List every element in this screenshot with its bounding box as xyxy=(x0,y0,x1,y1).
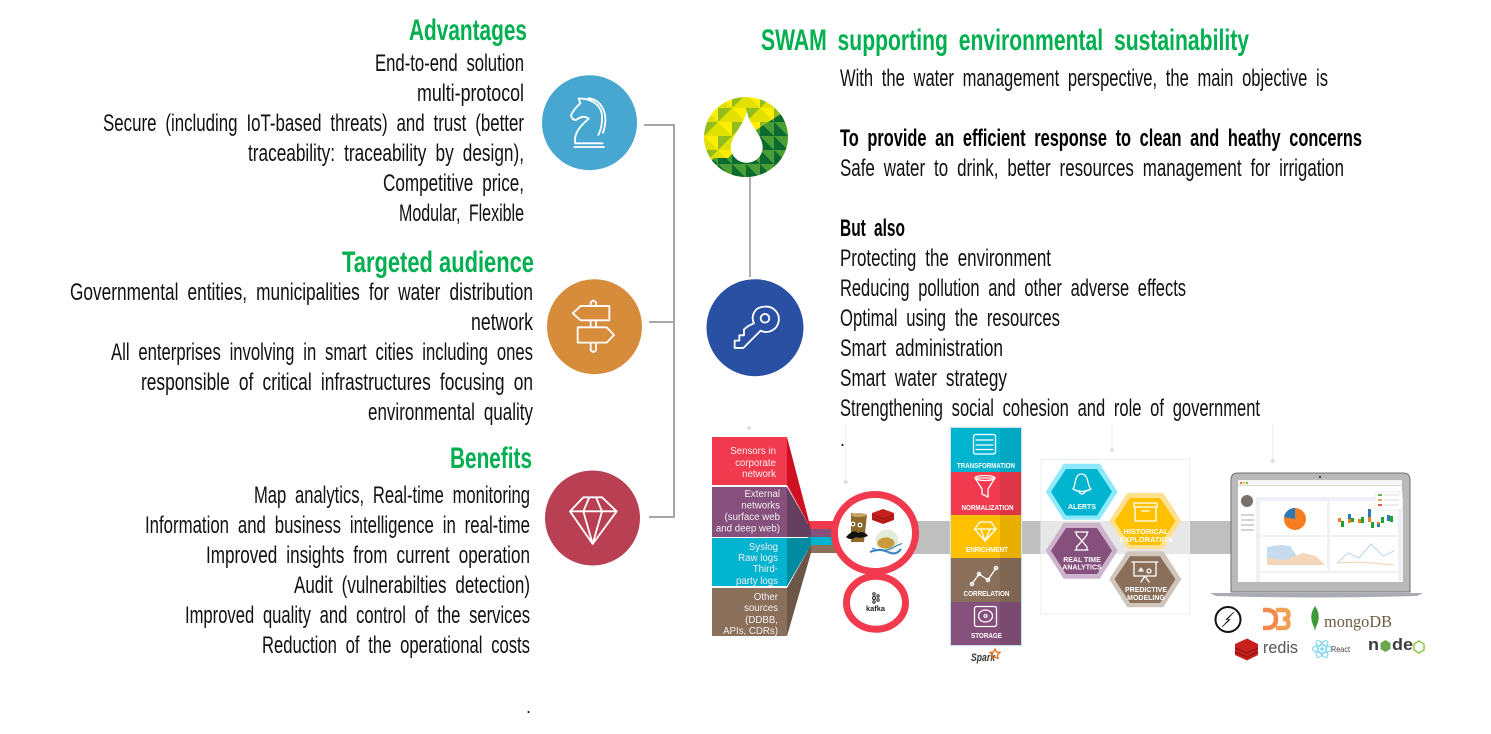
pin lines xyxy=(747,423,1275,484)
icon: kafka: kafka xyxy=(866,606,885,613)
source: external networks: External xyxy=(744,489,780,500)
kafka ring xyxy=(846,576,906,629)
text block: audience list: environmental quality xyxy=(368,399,533,426)
panel: SWAM text xyxy=(761,24,1362,450)
source: logs: Raw logs xyxy=(738,553,778,564)
text block: benefits list: Map analytics, Real-time monitoring xyxy=(254,482,530,509)
text block: audience list: All enterprises involving in smart cities including ones xyxy=(111,339,533,366)
source: sensors: corporate xyxy=(735,458,776,469)
hexagon: historical exploration: EXPLORATION xyxy=(1120,535,1172,544)
text block: audience list xyxy=(70,279,534,426)
ingestion ring with logos xyxy=(834,494,916,572)
panel: spark processing column xyxy=(950,428,1022,646)
panel: pie xyxy=(1260,501,1327,535)
text block: benefits list: Audit (vulnerabilties detection) xyxy=(294,572,530,599)
source: other: Other xyxy=(754,592,779,603)
icon: logstash log xyxy=(846,513,868,542)
hexagon: predictive modeling: PREDICTIVE xyxy=(1125,587,1167,594)
icon: redis xyxy=(1235,638,1298,660)
source: logs: Syslog xyxy=(749,542,778,553)
stage: transformation: TRANSFORMATION xyxy=(957,463,1015,470)
icon: spark logo: Spark xyxy=(971,652,996,664)
technology logos xyxy=(1216,606,1424,660)
source: logs: party logs xyxy=(736,576,778,587)
icon: redis: redis xyxy=(1263,638,1298,657)
panel: area chart xyxy=(1260,537,1327,571)
source: logs: Third- xyxy=(753,564,778,575)
text block: benefits list: Information and business intelligence in real-time xyxy=(145,512,530,539)
icon: mongoDB: mongoDB xyxy=(1324,612,1392,631)
stage: enrichment: ENRICHMENT xyxy=(966,547,1009,554)
icon: signpost circle xyxy=(547,279,642,374)
text block: advantages list: End-to-end solution xyxy=(375,50,524,77)
text block: audience list: network xyxy=(471,309,534,336)
text block: advantages list: Secure (including IoT-based threats) and trust (better xyxy=(103,110,524,137)
panel: targeted audience xyxy=(70,246,534,426)
source: logs xyxy=(712,538,811,587)
icon: mongoDB xyxy=(1311,606,1392,631)
text block: audience list: responsible of critical infrastructures focusing on xyxy=(141,369,533,396)
hexagon: predictive modeling xyxy=(1109,551,1181,607)
dashboard screen content xyxy=(1238,480,1403,582)
heading: SWAM title: SWAM supporting environmental sustainability xyxy=(761,24,1249,57)
source: external networks: (surface web xyxy=(725,512,780,523)
panel: popup xyxy=(1375,492,1402,510)
hexagon: real time analytics: REAL TIME xyxy=(1063,557,1101,564)
source: other: (DDBB, xyxy=(745,615,778,626)
text block: but also: Smart administration xyxy=(840,335,1003,362)
hexagon: historical exploration: HISTORICAL xyxy=(1123,527,1169,536)
icon: node: de xyxy=(1392,635,1413,654)
panel: bars xyxy=(1330,501,1398,535)
grey flow band xyxy=(910,521,1232,554)
text block: audience list: Governmental entities, municipalities for water distribution xyxy=(70,279,533,306)
chart: data pipeline diagram xyxy=(712,423,1424,664)
hexagon: alerts: ALERTS xyxy=(1068,504,1096,511)
icon: node xyxy=(1368,635,1424,654)
text block: benefits list xyxy=(145,482,531,717)
text block: advantages list: traceability: traceability by design), xyxy=(248,140,524,167)
hexagon: real time analytics: ANALYTICS xyxy=(1062,564,1102,572)
stage: normalization xyxy=(951,472,1021,515)
connector lines between left circles xyxy=(644,125,674,517)
hexagon: real time analytics xyxy=(1046,523,1118,579)
hexagon: predictive modeling: MODELING xyxy=(1127,595,1165,602)
text block: but also: But also xyxy=(840,215,905,242)
text block: benefits list: . xyxy=(526,697,531,717)
text block: advantages list: multi-protocol xyxy=(417,80,524,107)
stage: storage xyxy=(951,602,1021,645)
icon: blue swirl and potato xyxy=(870,530,902,553)
icon: redis cube xyxy=(872,509,894,524)
icon: knight circle xyxy=(542,75,637,170)
icon: key circle xyxy=(706,279,804,376)
text block: but also: Smart water strategy xyxy=(840,365,1007,392)
stage: transformation xyxy=(951,428,1021,472)
stage: correlation xyxy=(951,558,1021,602)
source: sensors: network xyxy=(742,469,776,480)
text block: but also: Optimal using the resources xyxy=(840,305,1060,332)
text block: benefits list: Reduction of the operational costs xyxy=(262,632,530,659)
coloured input bands xyxy=(808,521,838,553)
stage: enrichment xyxy=(951,515,1021,558)
icon: D3 xyxy=(1263,610,1288,628)
icon: socket.io xyxy=(1216,607,1240,632)
text block: benefits list: Improved insights from current operation xyxy=(206,542,530,569)
panel: line chart xyxy=(1330,537,1398,571)
text block: advantages list: Competitive price, xyxy=(383,170,524,197)
source: external networks xyxy=(712,487,811,537)
icon: gem circle xyxy=(545,470,640,566)
source: other: sources xyxy=(744,603,778,614)
text block: objective xyxy=(840,65,1362,182)
stage: storage: STORAGE xyxy=(971,633,1002,640)
stage: normalization: NORMALIZATION xyxy=(962,505,1014,512)
panel: data sources xyxy=(712,437,811,637)
text block: but also xyxy=(840,215,1260,450)
text block: but also: . xyxy=(840,430,845,450)
source: other xyxy=(712,545,811,637)
source: sensors: Sensors in xyxy=(730,446,776,457)
icon: React xyxy=(1312,639,1351,659)
text block: benefits list: Improved quality and control of the services xyxy=(185,602,530,629)
stage: correlation: CORRELATION xyxy=(964,591,1010,598)
source: sensors xyxy=(712,437,811,529)
icon: React: React xyxy=(1331,644,1351,654)
source: other: APIs, CDRs) xyxy=(723,626,778,637)
text block: but also: Reducing pollution and other adverse effects xyxy=(840,275,1186,302)
connector line between logo and key circle xyxy=(749,176,751,277)
hexagon: historical exploration xyxy=(1109,493,1181,549)
hexagon: alerts xyxy=(1046,464,1118,520)
text block: but also: Strengthening social cohesion and role of government xyxy=(840,395,1260,422)
source: external networks: networks xyxy=(741,500,780,512)
source: external networks: and deep web) xyxy=(716,524,780,534)
heading: targeted audience: Targeted audience xyxy=(342,246,534,279)
text block: but also: Protecting the environment xyxy=(840,245,1051,272)
text block: advantages list: Modular, Flexible xyxy=(399,200,524,227)
laptop dashboard xyxy=(1210,473,1423,598)
icon: node: n xyxy=(1368,635,1379,654)
panel: benefits xyxy=(145,442,532,717)
text block: advantages list xyxy=(103,50,524,227)
icon: water drop logo xyxy=(704,97,788,177)
heading: benefits: Benefits xyxy=(450,442,532,475)
heading: advantages: Advantages xyxy=(409,14,527,47)
panel: advantages xyxy=(103,14,527,227)
panel: analytics hexagons xyxy=(1041,460,1190,614)
